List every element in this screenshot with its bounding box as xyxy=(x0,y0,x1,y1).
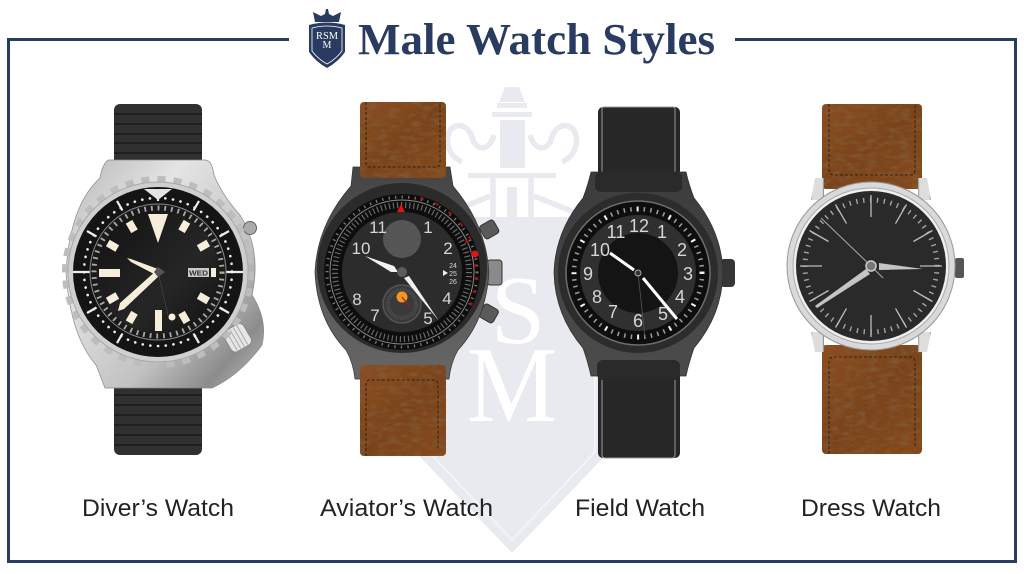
diver strap xyxy=(114,104,202,455)
aviator red triangle xyxy=(397,204,405,212)
field numerals xyxy=(583,216,693,331)
dress top strap xyxy=(822,104,922,189)
logo crest xyxy=(309,9,345,68)
dress lugs xyxy=(811,178,931,352)
diver black bezel xyxy=(73,187,243,357)
watermark monogram: M xyxy=(467,326,557,445)
field numerals: 5 xyxy=(658,304,668,324)
aviator numerals: 4 xyxy=(442,289,452,308)
logo crown xyxy=(313,9,341,22)
dress bottom strap xyxy=(822,345,922,454)
field bezel xyxy=(558,193,718,353)
watermark shield xyxy=(420,217,604,553)
field crown xyxy=(720,259,735,287)
diver bezel dots xyxy=(84,198,232,346)
diver bezel triangle xyxy=(144,189,172,200)
aviator inner dial xyxy=(342,212,462,332)
field numerals: 3 xyxy=(683,264,693,284)
diver hands xyxy=(118,258,168,315)
aviator date: 24 xyxy=(449,263,457,270)
label: diver's watch: Diver’s Watch xyxy=(82,495,234,522)
field numerals: 6 xyxy=(633,311,643,331)
diver case xyxy=(66,160,264,388)
diver small crown xyxy=(244,222,256,234)
aviator numerals: 7 xyxy=(370,306,380,325)
aviator numerals: 1 xyxy=(423,218,433,237)
field watch xyxy=(554,107,735,458)
diver date window: WED xyxy=(189,268,209,278)
field lug shadow xyxy=(595,172,682,192)
diver date window xyxy=(188,268,216,278)
label: dress watch: Dress Watch xyxy=(801,495,941,522)
aviator date: 26 xyxy=(449,279,457,286)
aviator date xyxy=(443,263,457,286)
diver toothed bezel xyxy=(65,179,251,365)
aviator case xyxy=(315,167,489,379)
diver hour markers xyxy=(108,222,208,322)
field strap xyxy=(598,107,680,458)
label: aviator's watch: Aviator’s Watch xyxy=(320,495,493,522)
field numerals: 2 xyxy=(677,240,687,260)
dress watch xyxy=(787,104,964,454)
aviator numerals: 11 xyxy=(369,218,387,237)
logo monogram xyxy=(316,31,338,51)
field numerals: 9 xyxy=(583,264,593,284)
aviator red dot xyxy=(472,250,478,258)
aviator top strap xyxy=(360,102,446,178)
diver inner dial xyxy=(97,211,219,333)
aviator's watch xyxy=(315,102,502,456)
aviator numerals: 5 xyxy=(423,309,433,328)
diver bezel major marks xyxy=(73,190,243,343)
dress hour ticks xyxy=(800,195,942,337)
diver lume dot xyxy=(168,314,176,320)
watermark crest xyxy=(420,87,604,553)
aviator hands xyxy=(365,256,439,321)
dress minute ticks xyxy=(805,200,937,332)
label: field watch: Field Watch xyxy=(575,495,705,522)
dress crown xyxy=(955,258,964,278)
field hands xyxy=(610,253,677,337)
watermark monogram: S xyxy=(491,257,545,365)
aviator numerals: 2 xyxy=(443,239,453,258)
field numerals: 7 xyxy=(608,302,618,322)
field centre dial xyxy=(598,233,678,313)
aviator bottom subdial xyxy=(383,285,421,323)
aviator bezel xyxy=(317,183,487,353)
field numerals: 4 xyxy=(675,287,685,307)
field numerals: 12 xyxy=(629,216,649,236)
aviator numerals: 8 xyxy=(352,290,362,309)
aviator slide rule ring xyxy=(324,194,480,350)
field minute ticks xyxy=(574,209,702,337)
diver twelve triangle xyxy=(148,214,168,243)
diver nine marker xyxy=(99,269,120,277)
logo monogram: RSM xyxy=(316,31,338,42)
field numerals: 11 xyxy=(607,222,625,242)
aviator numerals xyxy=(352,218,453,328)
aviator pushers xyxy=(478,219,502,324)
dress silver case xyxy=(787,182,955,350)
field mid ring xyxy=(580,215,696,331)
field lower lug shadow xyxy=(597,360,680,380)
field numerals: 8 xyxy=(592,287,602,307)
field numerals: 10 xyxy=(590,240,610,260)
watermark crown xyxy=(448,87,576,217)
field numerals: 1 xyxy=(657,222,667,242)
aviator numerals: 10 xyxy=(352,239,370,258)
diver minute track xyxy=(94,208,222,336)
aviator top subdial xyxy=(383,220,421,258)
title: Male Watch Styles xyxy=(358,15,715,64)
logo monogram: M xyxy=(323,40,332,51)
dress dial xyxy=(796,191,946,341)
logo shield xyxy=(309,22,345,68)
diver's watch xyxy=(65,104,264,455)
diver crown xyxy=(221,322,253,354)
aviator date: 25 xyxy=(449,271,457,278)
aviator bottom strap xyxy=(360,365,446,456)
diver dial xyxy=(90,204,226,340)
watermark monogram xyxy=(467,257,557,445)
field hour ticks xyxy=(574,209,702,337)
diver six marker xyxy=(155,310,162,331)
dress hands xyxy=(815,218,923,308)
field case xyxy=(554,172,723,376)
